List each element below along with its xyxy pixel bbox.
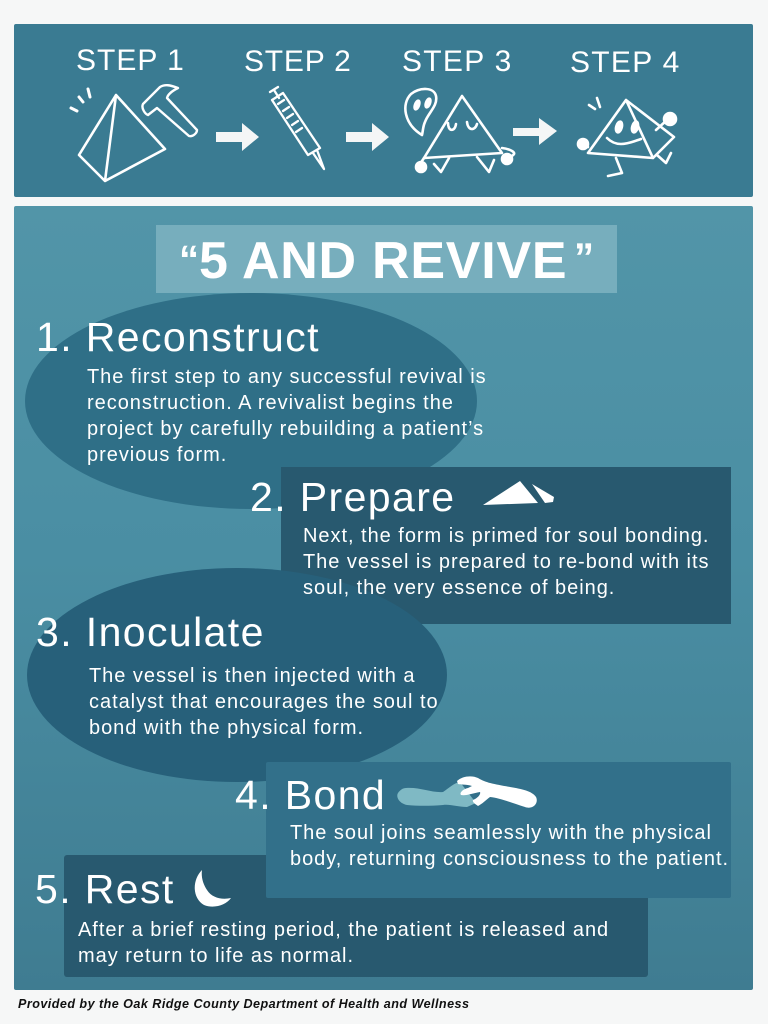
heading: step 1: 1. Reconstruct: [36, 314, 320, 360]
text: step 4 body: The soul joins seamlessly with the physical: [290, 822, 712, 844]
icon: pyramid and hammer: [71, 85, 197, 181]
arrow 3: [513, 118, 557, 145]
text: step 3 body: catalyst that encourages the soul to: [89, 691, 439, 713]
text: step 1 body: reconstruction. A revivalist begins the: [87, 392, 454, 414]
text: step 2 body: soul, the very essence of being.: [303, 577, 615, 599]
icon: happy triangle running: [578, 98, 676, 176]
arrow 1: [216, 123, 259, 151]
title closing quote: ”: [574, 236, 594, 280]
step 4 label: STEP 4: [570, 46, 681, 79]
text: step 2 body: Next, the form is primed for soul bonding.: [303, 525, 709, 547]
icon: ghost and triangle: [405, 89, 514, 172]
text: step 1 body: The first step to any successful revival is: [87, 366, 487, 388]
icons: step illustrations: [69, 84, 678, 182]
text: step 5 body: [78, 919, 609, 967]
shape: box behind step 2: [281, 467, 731, 624]
title opening quote: “: [179, 238, 199, 282]
icon: crescent moon: [194, 870, 231, 907]
arrow 2: [346, 123, 389, 151]
text: step 3 body: bond with the physical form.: [89, 717, 364, 739]
heading: step 4: 4. Bond: [235, 772, 386, 818]
text: step 4 body: [290, 822, 729, 870]
text: step 2 body: [303, 525, 709, 599]
step 3 label: STEP 3: [402, 45, 513, 78]
shape: ellipse behind step 3: [27, 568, 447, 782]
title: 5 AND REVIVE: [199, 232, 567, 290]
icon: pyramid: [483, 481, 554, 505]
footer credit: Provided by the Oak Ridge County Department of Health and Wellness: [18, 997, 469, 1011]
icon: syringe: [270, 87, 324, 169]
panel: steps banner: [14, 24, 753, 197]
heading: step 3: 3. Inoculate: [36, 609, 265, 655]
shape: box behind step 4: [266, 762, 731, 898]
title banner: [156, 225, 617, 293]
icon: joined hands: [397, 776, 537, 808]
text: step 4 body: body, returning consciousness to the patient.: [290, 848, 729, 870]
text: step 5 body: After a brief resting period, the patient is released and: [78, 919, 609, 941]
text: step 1 body: [87, 366, 487, 466]
text: step 2 body: The vessel is prepared to re-bond with its: [303, 551, 709, 573]
shape: box behind step 5: [64, 855, 648, 977]
step 2 label: STEP 2: [244, 45, 352, 78]
text: step 1 body: project by carefully rebuilding a patient’s: [87, 418, 484, 440]
heading: step 5: 5. Rest: [35, 866, 175, 912]
shape: ellipse behind step 1: [25, 293, 477, 509]
text: step 3 body: The vessel is then injected with a: [89, 665, 415, 687]
text: step 3 body: [89, 665, 439, 739]
text: step 1 body: previous form.: [87, 444, 227, 466]
text: step 5 body: may return to life as normal.: [78, 945, 354, 967]
step 1 label: STEP 1: [76, 44, 185, 77]
panel: main content: [14, 206, 753, 990]
heading: step 2: 2. Prepare: [250, 474, 455, 520]
